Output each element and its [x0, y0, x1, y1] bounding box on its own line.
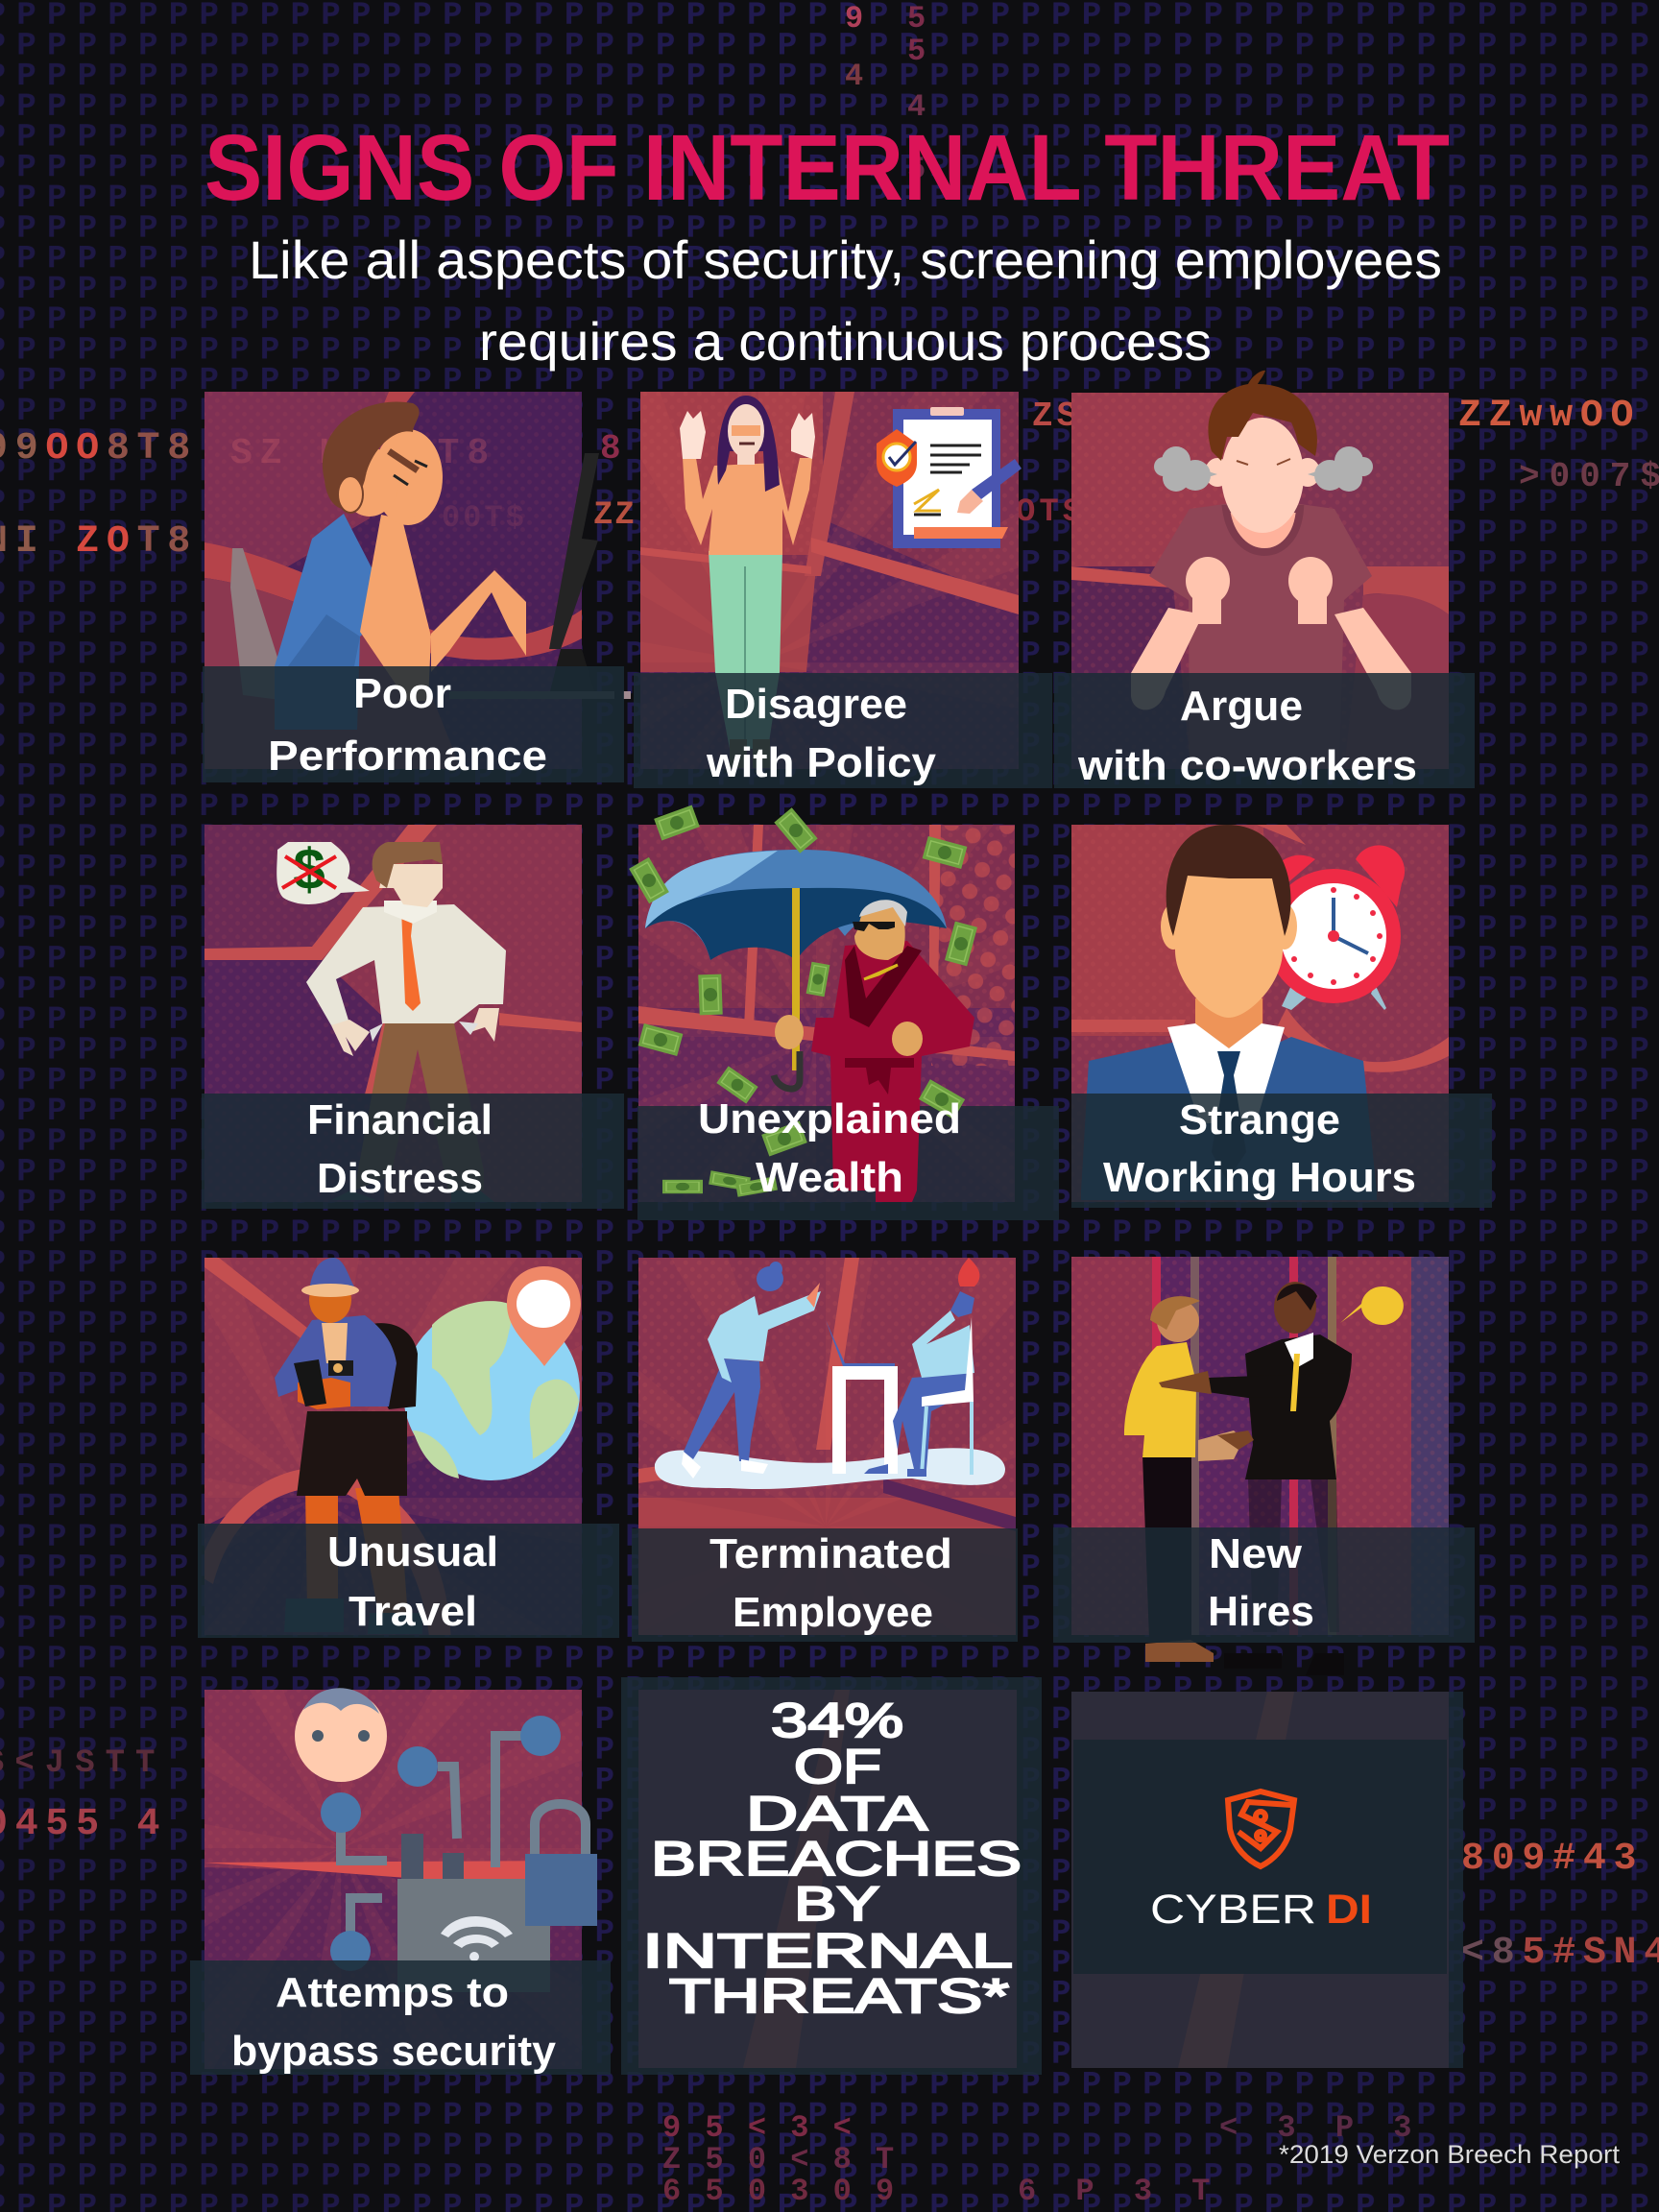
caption: new hires: Hires: [1208, 1588, 1314, 1635]
icon: no money speech bubble: $: [293, 837, 325, 902]
caption: unusual travel: Unusual: [327, 1528, 498, 1575]
icon: white floor cloud: [655, 1448, 1005, 1489]
caption: strange working hours: [1103, 1096, 1416, 1201]
panel: poor performance: 00T$: [442, 500, 527, 536]
caption: new hires: New: [1209, 1530, 1303, 1577]
icon: policy clipboard: [877, 407, 1022, 548]
footnote: *2019 Verzon Breech Report: [1279, 2140, 1621, 2169]
background code characters: 9: [845, 1, 863, 36]
panel: attempts to bypass security: [190, 1688, 611, 2075]
caption: unexplained wealth: [698, 1095, 961, 1201]
caption: argue with co-workers: with co-workers: [1077, 742, 1417, 789]
caption band: [190, 1960, 611, 2075]
icon: frustrated woman: [680, 396, 815, 768]
icon: face: [295, 1688, 387, 1782]
caption: strange working hours: Working Hours: [1103, 1154, 1416, 1201]
stat overlay: [621, 1677, 1042, 2075]
panel: new hires: [1053, 1257, 1475, 1675]
icon: man with umbrella and money: [629, 805, 977, 1202]
caption band: [198, 1524, 619, 1638]
caption: unusual travel: Travel: [349, 1588, 477, 1635]
background code characters: 809#43: [1461, 1838, 1644, 1881]
caption: terminated employee: [709, 1530, 952, 1636]
caption: disagree with policy: with Policy: [706, 739, 937, 786]
icon: speech bubble: [1340, 1286, 1404, 1325]
background code characters: 8: [600, 429, 621, 469]
icon: man with empty pockets: [306, 842, 506, 1202]
background code characters: ZZ: [593, 497, 637, 534]
caption band: [632, 1528, 1018, 1642]
logo box: [1073, 1740, 1447, 1974]
background code characters: < 3 P 3: [1219, 2110, 1422, 2146]
caption: strange working hours: Strange: [1179, 1096, 1340, 1143]
background code characters: 6 5 0 3 0 9: [662, 2174, 897, 2209]
background code characters: OTS: [1016, 494, 1086, 531]
caption band: [637, 1106, 1059, 1220]
caption: financial distress: Distress: [317, 1155, 483, 1202]
caption: terminated employee: Employee: [733, 1589, 933, 1636]
caption: poor performance: Poor: [353, 670, 451, 717]
icon: arguing coworkers: [682, 1258, 979, 1479]
caption: attempts to bypass security: Attemps to: [276, 1969, 509, 2016]
caption: terminated employee: Terminated: [709, 1530, 952, 1577]
caption: attempts to bypass security: bypass security: [231, 2028, 557, 2075]
statistic text: [642, 1694, 1022, 2023]
caption: unusual travel: [327, 1528, 498, 1635]
panel: disagree with policy: [634, 392, 1052, 788]
background code characters: ZS: [1032, 397, 1081, 436]
icon: alarm clock: [1266, 845, 1405, 1010]
statistic text: DATA: [746, 1787, 928, 1840]
caption: disagree with policy: Disagree: [725, 681, 907, 728]
statistic text: BY: [794, 1877, 879, 1931]
caption: disagree with policy: [706, 681, 937, 786]
background code characters: 5: [907, 152, 926, 187]
caption band: [634, 673, 1052, 788]
caption band: [202, 1094, 624, 1209]
icon: tired employee at monitor: [230, 401, 631, 730]
caption: poor performance: Performance: [268, 733, 547, 780]
caption: unexplained wealth: Unexplained: [698, 1095, 961, 1142]
background code characters: 6 P 3 T: [1018, 2174, 1220, 2209]
caption band: [1053, 1527, 1475, 1643]
logo overlay: [1071, 1692, 1463, 2068]
icon: angry man with steam: [1131, 371, 1411, 768]
panel: argue with co-workers: [1054, 371, 1475, 789]
subtitle: requires a continuous process: [479, 311, 1212, 372]
icon: handshake coworkers: [1124, 1282, 1352, 1675]
caption: argue with co-workers: [1077, 683, 1417, 789]
icon: network router and lock: [321, 1716, 597, 1992]
caption: attempts to bypass security: [231, 1969, 557, 2075]
caption band: [203, 666, 624, 782]
statistic text: 34%: [771, 1694, 903, 1747]
background code characters: 9 5 < 3 <: [662, 2110, 854, 2146]
caption: unexplained wealth: Wealth: [756, 1154, 903, 1201]
title: SIGNS OF INTERNAL THREAT: [204, 115, 1450, 220]
icon: no money speech bubble: [276, 837, 370, 904]
icon: globe with pin: [403, 1266, 581, 1480]
background code characters: 4: [907, 89, 926, 125]
caption: new hires: [1208, 1530, 1314, 1635]
panel: financial distress: [202, 825, 624, 1209]
background code characters: 4: [845, 59, 863, 94]
background code characters: 5: [907, 34, 926, 69]
icon: businessman: [1081, 825, 1377, 1200]
logo wordmark accent: DI: [1326, 1887, 1372, 1933]
logo wordmark: CYBER: [1150, 1887, 1316, 1933]
statistic text: INTERNAL: [642, 1924, 1013, 1978]
caption band: [1054, 673, 1475, 788]
caption: financial distress: [307, 1096, 493, 1202]
statistic text: BREACHES: [651, 1832, 1022, 1886]
statistic text: OF: [794, 1740, 881, 1793]
background code characters: Z 5 0 < 8 T: [662, 2142, 897, 2177]
subtitle: [249, 229, 1442, 372]
panel: strange working hours: [1071, 825, 1492, 1208]
caption: argue with co-workers: Argue: [1180, 683, 1303, 730]
background code characters: ZZwwOO: [1458, 395, 1641, 438]
statistic text: THREATS*: [669, 1969, 1009, 2023]
panel: terminated employee: [632, 1258, 1018, 1642]
caption band: [1071, 1094, 1492, 1208]
background code characters: 5: [907, 1, 926, 36]
icon: traveller: [275, 1258, 422, 1634]
panel: cyberdi logo: [1071, 1692, 1463, 2068]
caption: financial distress: Financial: [307, 1096, 493, 1143]
subtitle: Like all aspects of security, screening employees: [249, 229, 1442, 290]
caption: poor performance: [268, 670, 547, 780]
panel: poor performance: [203, 392, 631, 782]
icon: cyberdi shield: [1228, 1791, 1294, 1866]
panel: unusual travel: [198, 1258, 619, 1638]
panel: 34 percent statistic: [621, 1677, 1042, 2075]
panel: unexplained wealth: [629, 805, 1059, 1220]
panel: poor performance: SZ HOO8T8: [230, 433, 496, 474]
